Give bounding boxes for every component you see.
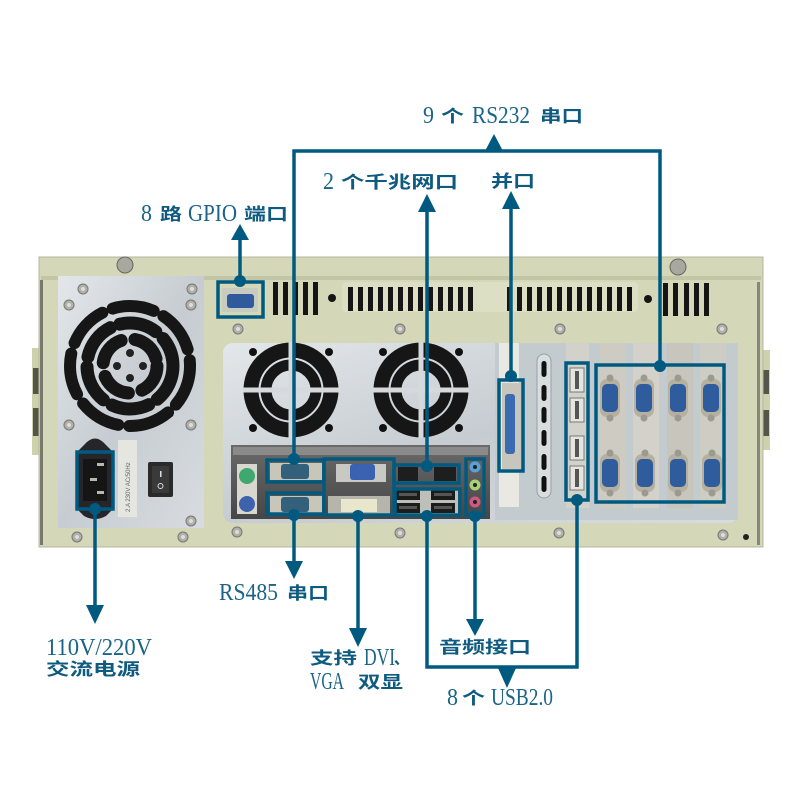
label: dvi vga: DVI: [364, 645, 395, 671]
label: 9 rs232: 9: [423, 103, 434, 129]
arrow: parallel: [502, 191, 520, 382]
arrow: rs232 bracket: [288, 134, 666, 465]
label: gpio: 路: [160, 205, 182, 224]
label: 9 rs232: 个: [441, 107, 464, 126]
lan ports: [398, 467, 456, 481]
vga port: [336, 464, 386, 482]
label: power: 交流电源: [46, 659, 140, 679]
label: dvi vga: [310, 645, 409, 695]
label: usb: 个: [462, 689, 485, 708]
label: gpio: 端口: [244, 205, 288, 224]
usb stack: [570, 368, 584, 490]
label: dvi vga: 支持: [310, 648, 357, 668]
psu panel: [58, 276, 204, 528]
parallel connector: [502, 383, 521, 469]
label: 2 gigabit lan: 个千兆网口: [341, 173, 458, 192]
arrow: rs485: [285, 509, 303, 579]
rear opening: [223, 342, 738, 523]
ps2 ports: [237, 464, 257, 514]
callout box: power: [77, 452, 113, 509]
chassis rear photo: [32, 257, 770, 547]
callout box: audio: [466, 459, 484, 515]
label: gpio: 8: [141, 201, 152, 227]
serial ports: [270, 463, 322, 513]
label: 2 gigabit lan: 2: [323, 169, 334, 195]
arrow: gpio: [231, 224, 249, 287]
arrow: usb bracket: [421, 494, 583, 688]
power switch: [148, 462, 173, 497]
label: 9 rs232: 串口: [540, 107, 583, 126]
label: rs485: [219, 580, 329, 606]
label: gpio: GPIO: [188, 201, 237, 227]
arrow: audio: [466, 510, 484, 636]
gpio connector: [222, 288, 258, 312]
label: rs485: RS485: [219, 580, 278, 606]
callout box: usb: [395, 489, 460, 515]
label: power: [46, 635, 153, 679]
label: usb: 8: [447, 685, 458, 711]
callout box: gpio: [218, 282, 263, 317]
arrow: lan: [418, 194, 436, 472]
label: audio: 音频接口: [439, 637, 531, 657]
top screws: [72, 257, 749, 542]
callout box: rs232 onboard: [267, 460, 324, 482]
slot with holes: [537, 354, 551, 498]
arrow: dvi: [349, 510, 367, 647]
usb ports: [396, 490, 458, 514]
rating label: 2.A 230V AC/50Hz: [126, 462, 132, 512]
label: usb: USB2.0: [491, 685, 553, 711]
dvi port: [328, 496, 390, 514]
power socket: [77, 438, 113, 519]
callout box: rs232 cards: [596, 365, 724, 502]
io backplate: [231, 445, 490, 519]
label: 9 rs232: [423, 103, 583, 129]
label: 9 rs232: RS232: [472, 103, 530, 129]
callout box: usb stack: [566, 363, 588, 500]
label: dvi vga: 双显: [358, 673, 403, 692]
callout box: parallel: [499, 380, 523, 471]
rating label: [118, 440, 137, 517]
label: dvi vga: 、: [394, 649, 409, 668]
audio jacks: [470, 462, 480, 508]
label: parallel: 并口: [491, 171, 535, 191]
label: rs485: 串口: [287, 584, 329, 603]
label: power: 110V/220V: [46, 635, 153, 661]
label: 2 gigabit lan: [323, 169, 458, 195]
label: gpio: [141, 201, 288, 227]
callout box: rs485: [267, 493, 324, 514]
arrow: power: [86, 503, 104, 624]
db9 connectors: [600, 374, 722, 496]
label: dvi vga: VGA: [310, 669, 344, 695]
cooling fans: [243, 342, 469, 438]
vent slots: [273, 282, 709, 316]
callout box: vga dvi: [324, 459, 394, 515]
label: usb: [447, 685, 553, 711]
callout box: lan: [394, 465, 459, 483]
